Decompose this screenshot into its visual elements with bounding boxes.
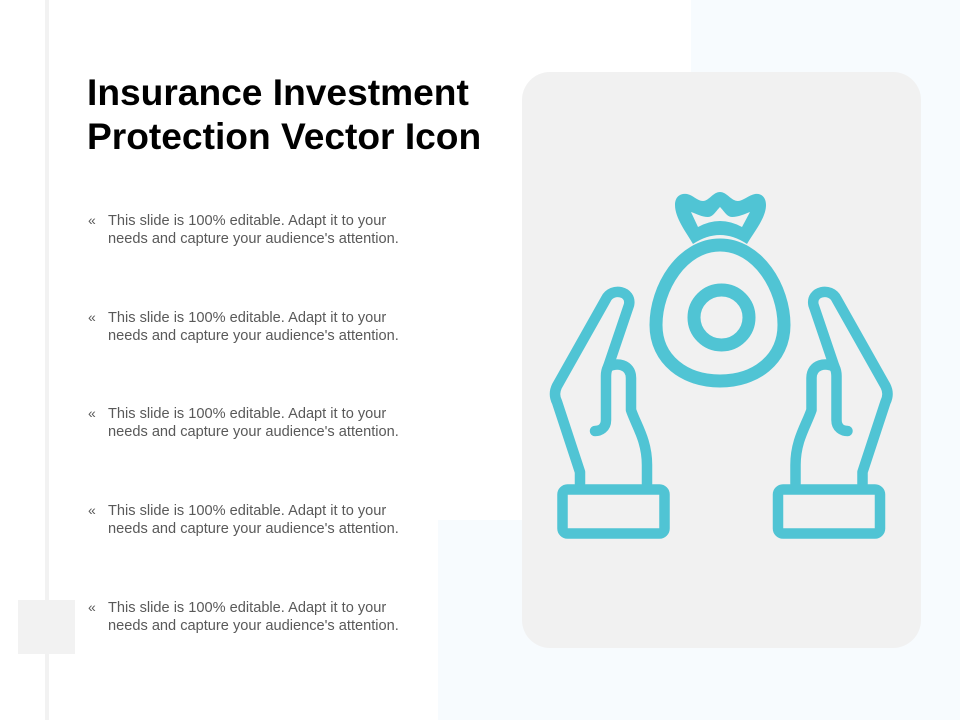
bullet text 5: « — [88, 599, 96, 615]
bullet text 5: needs and capture your audience's attention. — [108, 618, 399, 634]
bullet text 5: This slide is 100% editable. Adapt it to your — [108, 600, 386, 616]
panel: icon background — [522, 72, 921, 648]
bullet text 3: « — [88, 405, 96, 421]
title: Insurance Investment — [87, 70, 469, 112]
bullet text 4: needs and capture your audience's attention. — [108, 521, 399, 537]
bullet text 3 — [88, 405, 399, 440]
bullet text 2: « — [88, 309, 96, 325]
bullet text 3: needs and capture your audience's attention. — [108, 424, 399, 440]
bullet text 1: needs and capture your audience's attention. — [108, 231, 399, 247]
icon: money bag — [656, 192, 784, 381]
bullet text 1: « — [88, 212, 96, 228]
bullet text 2: needs and capture your audience's attention. — [108, 328, 399, 344]
bullet text 5 — [88, 599, 399, 634]
bullet text 4: This slide is 100% editable. Adapt it to your — [108, 503, 386, 519]
icon: left hand — [555, 292, 664, 534]
bullet text 2 — [88, 309, 399, 344]
bullet text 2: This slide is 100% editable. Adapt it to your — [108, 310, 386, 326]
title — [87, 70, 481, 157]
bullet text 3: This slide is 100% editable. Adapt it to your — [108, 406, 386, 422]
bullet text 4: « — [88, 502, 96, 518]
title: Protection Vector Icon — [87, 115, 481, 157]
icon: right hand — [778, 292, 888, 534]
bullet text 4 — [88, 502, 399, 537]
bullet text 1 — [88, 212, 399, 247]
bullet text 1: This slide is 100% editable. Adapt it to your — [108, 213, 386, 229]
